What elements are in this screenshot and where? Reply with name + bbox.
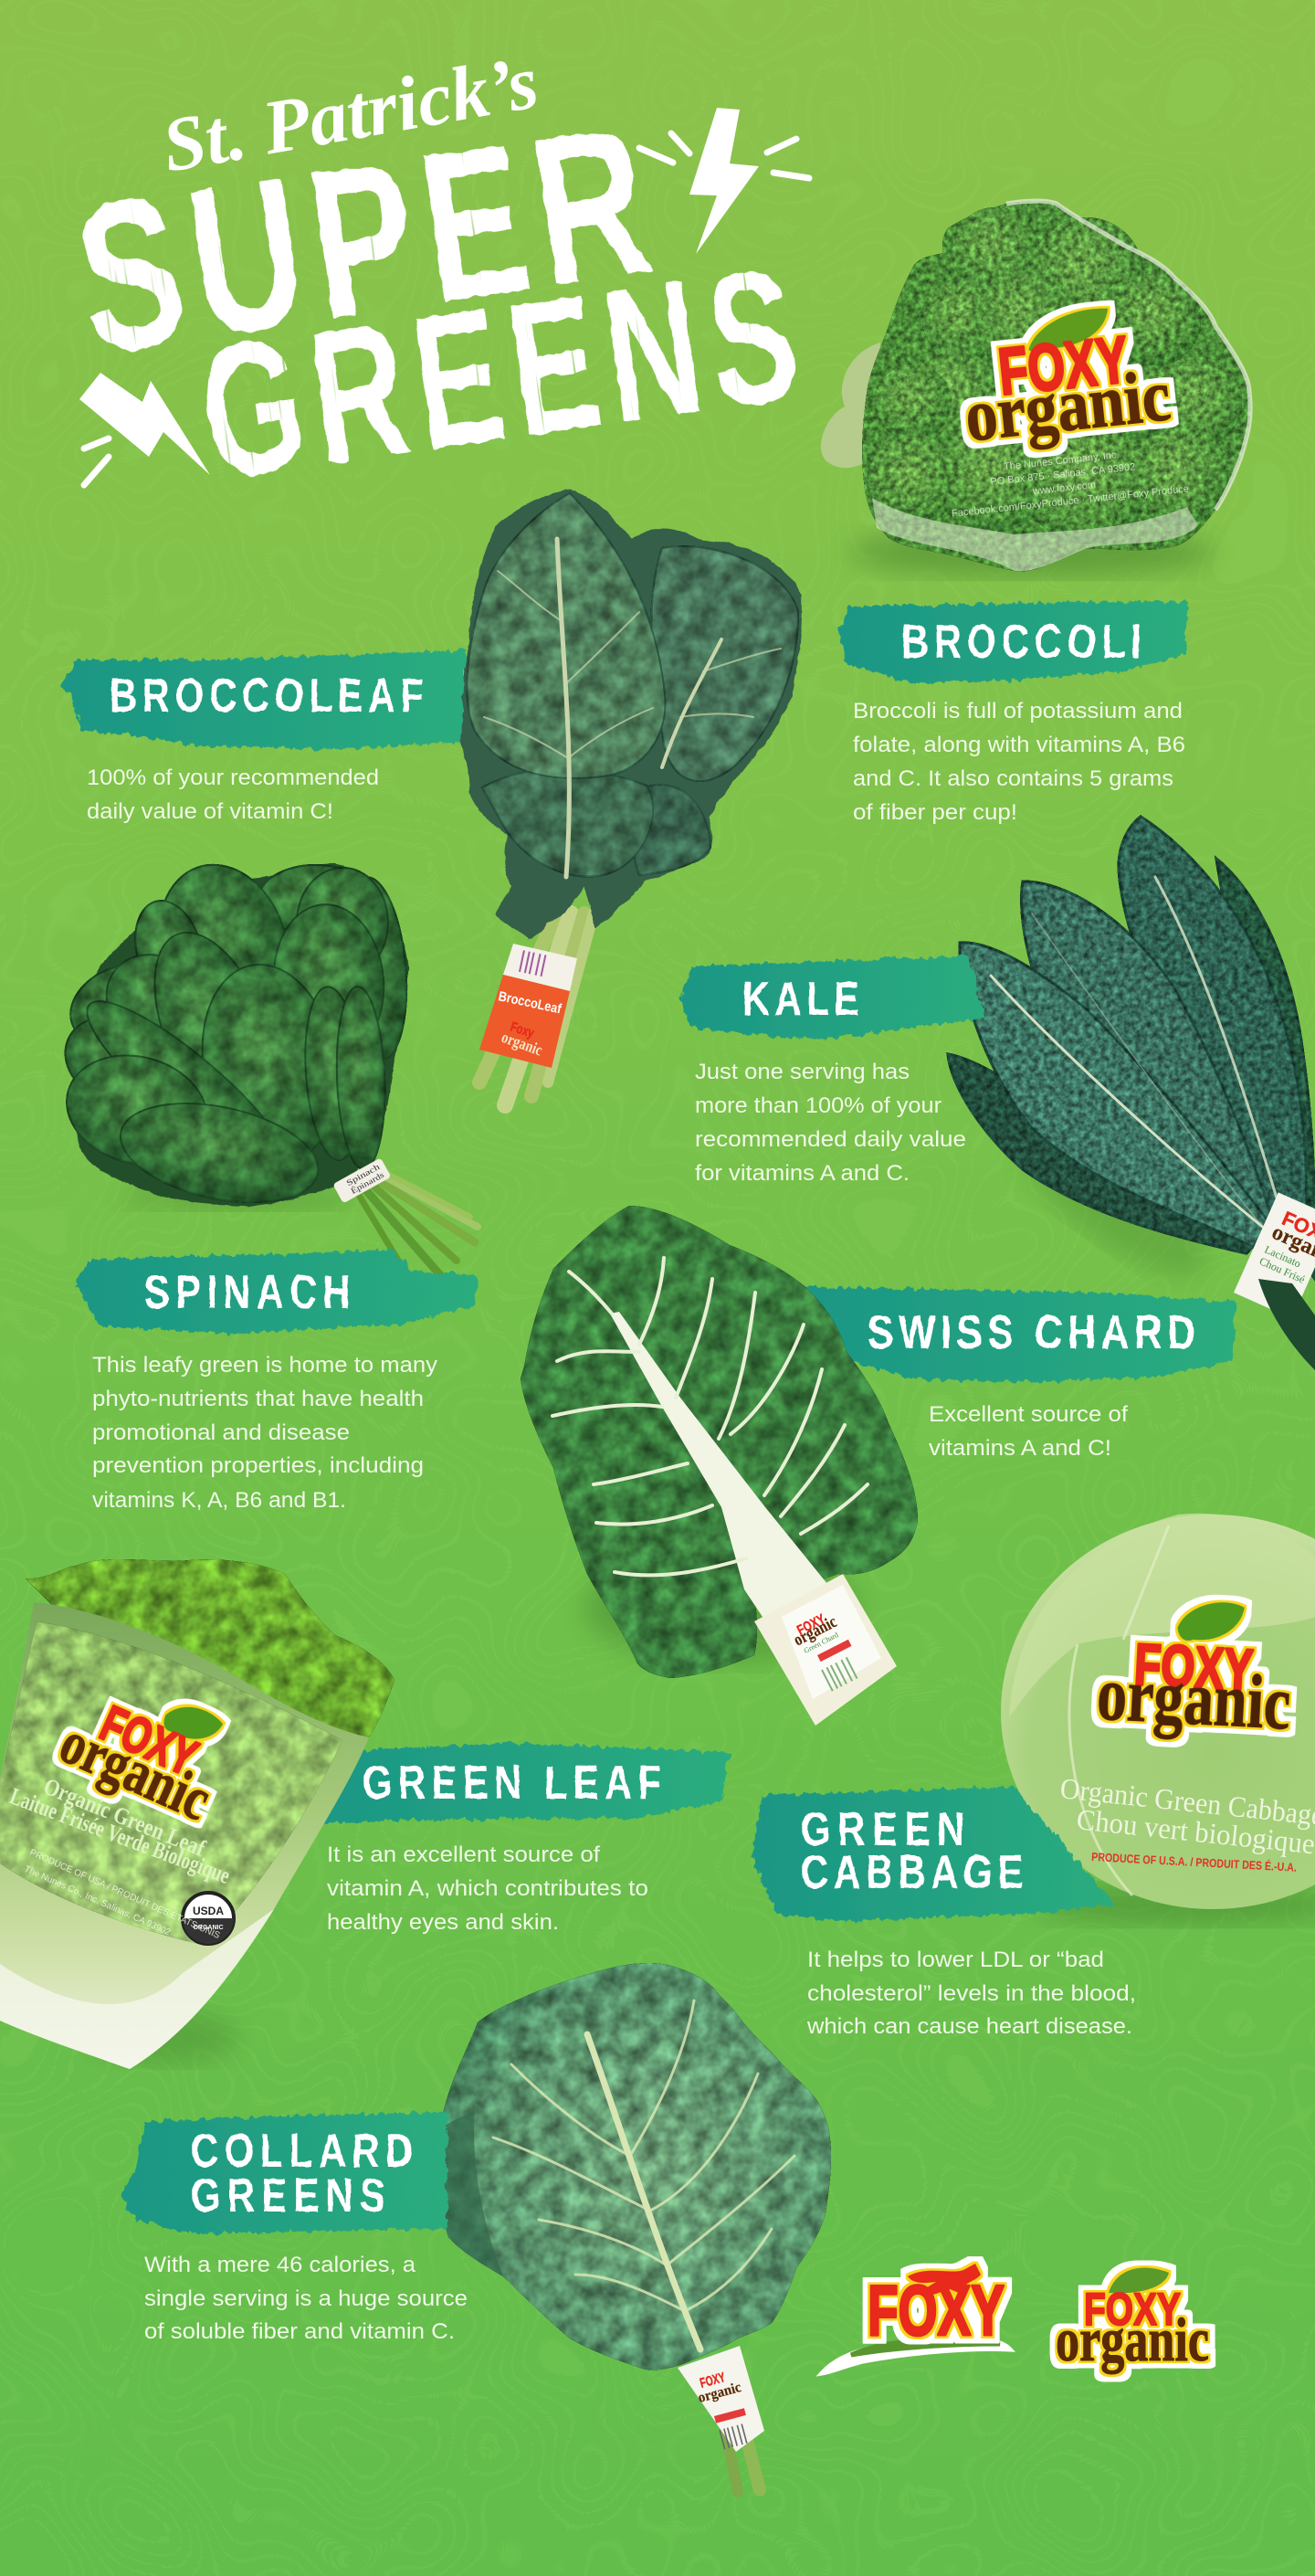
swiss chard photo [521,1206,918,1726]
text: broccoli: of fiber per cup! [853,800,1017,825]
chard label [754,1574,897,1726]
text: green leaf: It is an excellent source of [327,1842,600,1867]
bag [0,1602,369,2069]
text: broccoleaf: 100% of your recommended [87,765,379,790]
lettuce frill [26,1559,394,1754]
text: broccoleaf: daily value of vitamin C! [87,799,333,824]
banner: kale: KALE [742,972,859,1025]
kale bunch photo [948,817,1315,1370]
text: collard greens [144,2253,468,2344]
text: collard greens: With a mere 46 calories, a [144,2253,416,2277]
text: green cabbage: which can cause heart disease. [806,2014,1132,2039]
banner: broccoleaf [60,650,466,749]
collard label: organic [697,2380,742,2406]
text: kale: more than 100% of your [695,1093,942,1118]
broccoli package text: PO Box 875 · Salinas, CA 93902 [990,461,1136,488]
logo: foxy organic [1056,2268,1209,2374]
spinach band [332,1157,391,1203]
collard label [678,2346,764,2452]
kale label [1234,1192,1315,1325]
text: swiss chard [929,1402,1128,1461]
banner: swiss chard: SWISS CHARD [868,1306,1195,1359]
logo on broccoli: organic [962,355,1174,457]
text: green leaf [327,1842,648,1935]
text: spinach: prevention properties, including [92,1453,424,1478]
logo on broccoli [955,302,1174,457]
text: kale: Just one serving has [695,1060,910,1084]
kale label: Chou Frisé [1257,1254,1307,1286]
icon: lower lightning bolt [79,373,210,485]
logo: foxy organic: organic [1056,2305,1209,2374]
chard label: organic [791,1612,840,1650]
green cabbage photo [1001,1514,1315,1925]
text: collard greens: single serving is a huge source [144,2286,468,2311]
collard label: FOXY [699,2370,727,2391]
banner: collard greens [120,2112,447,2233]
usda seal: USDA [193,1905,224,1917]
text: swiss chard: Excellent source of [929,1402,1128,1427]
text: green cabbage [806,1948,1136,2039]
text: green leaf: healthy eyes and skin. [327,1910,559,1935]
banner: collard greens: GREENS [191,2169,385,2222]
broccoli package text: www.foxy.com [1031,480,1097,497]
title [63,39,810,520]
collard leaf [438,1963,831,2370]
broccoleaf stems [479,913,594,1105]
text: broccoli [853,699,1185,825]
broccoleaf label: Foxy [509,1019,536,1041]
banner: spinach [76,1250,478,1334]
text: swiss chard: vitamins A and C! [929,1436,1111,1461]
banner: green cabbage [751,1787,1115,1921]
spinach band: Spinach [345,1162,382,1188]
collard greens photo [438,1963,831,2492]
banner: green leaf: GREEN LEAF [363,1756,661,1809]
chard midrib and veins [610,1312,836,1617]
chard label: FOXY [794,1611,827,1639]
broccoli head photo [821,201,1250,576]
text: spinach: This leafy green is home to many [92,1353,437,1378]
text: spinach: phyto-nutrients that have health [92,1387,424,1411]
text: spinach: promotional and disease [92,1420,350,1445]
logo on bag: organic [50,1709,220,1833]
logo on bag [50,1663,241,1833]
title line: St. Patrick's: St. Patrick’s [156,39,544,189]
text: kale: for vitamins A and C. [695,1161,910,1186]
text: broccoli: Broccoli is full of potassium and [853,699,1183,723]
icon: upper lightning bolt [639,108,809,254]
broccoli package text: The Nunes Company, Inc. [1004,449,1120,472]
bag fine print: PRODUCE OF USA / PRODUIT DES ÉTATS-UNIS [28,1846,222,1941]
text: spinach [92,1353,437,1513]
banner: spinach: SPINACH [144,1265,351,1318]
broccoleaf label: BroccoLeaf [497,988,563,1018]
broccoleaf bunch photo [457,490,802,1105]
text: spinach: vitamins K, A, B6 and B1. [92,1488,346,1513]
text: kale [695,1060,966,1186]
logo on cabbage [1095,1596,1296,1746]
broccoleaf leaves [457,490,802,938]
logo: foxy [822,2264,1010,2373]
text: kale: recommended daily value [695,1127,966,1152]
collard stems [721,2412,760,2492]
spinach stems [352,1169,478,1282]
collard veins [493,2001,794,2349]
logo on bag: FOXY [92,1694,206,1787]
green leaf lettuce bag photo [0,1559,394,2069]
chard leaf [521,1206,918,1678]
text: green cabbage: cholesterol” levels in the blood, [807,1981,1136,2006]
spinach band: Épinards [349,1169,386,1196]
logo on cabbage: FOXY [1132,1631,1255,1703]
bag product name: Organic Green Leaf [40,1773,209,1862]
text: broccoleaf [87,765,379,824]
text: green cabbage: It helps to lower LDL or “bad [807,1948,1104,1972]
usda seal: ORGANIC [193,1925,224,1931]
spinach bunch photo [51,848,478,1282]
title line: GREENS: GREENS [188,226,810,520]
banner: swiss chard [793,1287,1236,1382]
broccoleaf label [479,944,577,1068]
usda seal [183,1893,234,1944]
banner: green cabbage: CABBAGE [801,1845,1023,1898]
bag product name: Laitue Frisée Verde Biologique [6,1782,234,1889]
title line: SUPER: SUPER [63,80,662,399]
kale label: Lacinato [1263,1243,1303,1270]
broccoli package text [947,443,1189,520]
chard label: Green Chard [803,1631,840,1655]
text: green leaf: vitamin A, which contributes to [327,1876,648,1901]
bag fine print: The Nunes Co., Inc. Salinas, CA 93902 [23,1864,173,1938]
text: collard greens: of soluble fiber and vitamin C. [144,2319,455,2344]
broccoli package text: Facebook.com/FoxyProduce · Twitter@Foxy Produce [952,483,1189,520]
banner: collard greens: COLLARD [191,2124,413,2177]
banner: green leaf [302,1743,730,1823]
logo: foxy: FOXY [868,2270,1005,2350]
text: broccoli: folate, along with vitamins A, B6 [853,733,1185,757]
text: broccoli: and C. It also contains 5 grams [853,766,1173,791]
banner: kale [679,956,985,1040]
banner: broccoli: BROCCOLI [901,615,1141,668]
kale leaves [948,817,1315,1279]
banner: green cabbage: GREEN [801,1802,964,1855]
banner: broccoli [838,601,1187,683]
banner: broccoleaf: BROCCOLEAF [110,669,424,722]
broccoleaf label: organic [500,1028,545,1059]
logo on broccoli: FOXY [995,323,1131,409]
logo: foxy organic: FOXY [1084,2284,1181,2335]
spinach leaves [74,864,408,1206]
